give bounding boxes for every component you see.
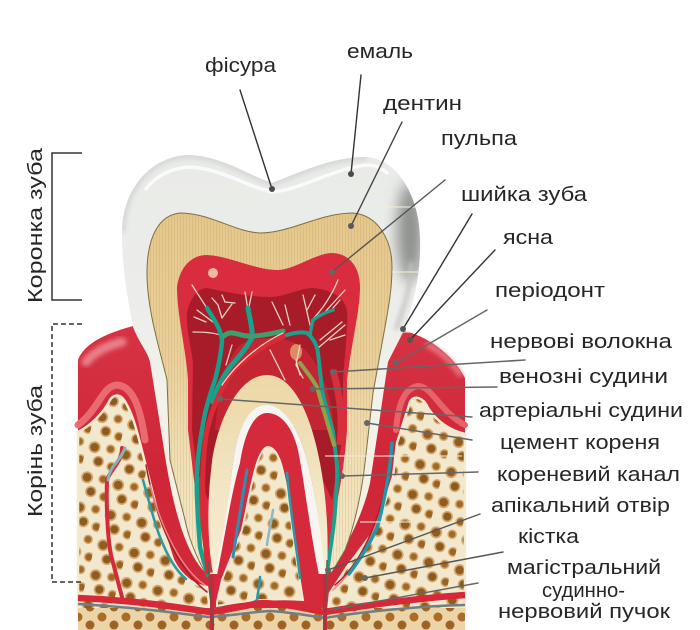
- label: veins: венозні судини: [499, 365, 668, 388]
- faint section markers: [325, 207, 462, 522]
- leader: apical foramen: [325, 514, 480, 573]
- label: arteries: артеріальні судини: [479, 399, 683, 422]
- label: pulp: пульпа: [441, 127, 518, 150]
- central gum arch: [212, 413, 324, 605]
- bone: left: [78, 396, 210, 612]
- bracket: crown: [52, 153, 82, 300]
- leader: fissure: [240, 90, 275, 192]
- label: dentin: дентин: [383, 92, 462, 115]
- label: neurovascular bundle: нервовий пучок: [498, 600, 671, 623]
- leader: veins: [310, 386, 497, 392]
- label: fissure: фісура: [205, 54, 277, 77]
- bone: right: [328, 398, 465, 612]
- pulp chamber: [177, 253, 360, 572]
- labels: [205, 40, 683, 623]
- label: root cementum: цемент кореня: [500, 431, 660, 454]
- enamel and cementum: [122, 155, 420, 574]
- lower bone: [78, 608, 465, 630]
- enamel shading: [122, 155, 423, 330]
- leader: tooth neck: [400, 214, 472, 332]
- leader: bone: [362, 552, 503, 581]
- label: neurovascular bundle: магістральний: [507, 556, 661, 579]
- vessels in bone: [107, 443, 392, 608]
- label: nerve fibres: нервові волокна: [490, 330, 673, 353]
- label: enamel: емаль: [347, 40, 413, 63]
- leader: gum: [407, 250, 495, 343]
- label: neurovascular bundle: [498, 556, 671, 623]
- label: root canal: кореневий канал: [497, 463, 680, 486]
- white arch of inner cementum: [214, 405, 325, 574]
- leader: root canal: [339, 472, 478, 479]
- dentin: [147, 213, 392, 572]
- leader: pulp: [329, 180, 445, 275]
- label: tooth neck: шийка зуба: [461, 183, 588, 206]
- gum tissue: [78, 326, 465, 612]
- leader: arteries: [217, 396, 472, 417]
- central bone: [217, 447, 303, 606]
- dentin arch between roots: [208, 375, 328, 574]
- vessels in pulp: [197, 308, 337, 575]
- leader lines: [217, 75, 525, 610]
- nerve branches: [192, 280, 345, 380]
- leader: enamel: [348, 75, 361, 177]
- leader: neurovascular bundle: [330, 583, 478, 610]
- label: bone: кістка: [518, 525, 580, 548]
- main neurovascular bundle: [78, 560, 465, 630]
- label: neurovascular bundle: судинно-: [542, 579, 625, 602]
- leader: root cementum: [364, 420, 472, 440]
- label: crown: Коронка зуба: [24, 147, 47, 303]
- illustration: tooth cross-section: [78, 155, 465, 630]
- label: root: Корінь зуба: [24, 384, 47, 517]
- leader: periodontium: [393, 310, 487, 366]
- label: periodontium: періодонт: [495, 279, 606, 302]
- gum highlights: [78, 342, 465, 440]
- label: apical foramen: апікальний отвір: [491, 494, 670, 517]
- bracket: root: [52, 324, 82, 582]
- root fan of periodontal fibres: [146, 462, 389, 592]
- leader: dentin: [348, 122, 402, 229]
- tooth: [122, 155, 423, 606]
- label: gum: ясна: [503, 226, 554, 249]
- leader: nerve fibres: [330, 360, 525, 375]
